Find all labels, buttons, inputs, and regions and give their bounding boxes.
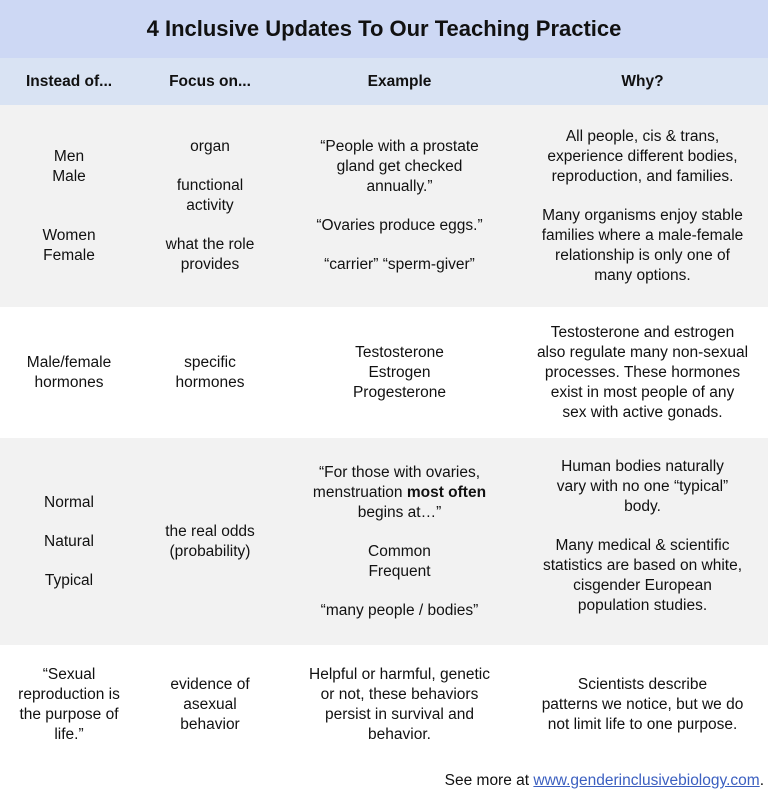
row 2: sex with active gonads.: [562, 404, 723, 420]
row 1: Many organisms enjoy stable: [542, 206, 743, 224]
row 3: the real odds: [165, 522, 255, 540]
row 4: persist in survival and: [325, 706, 474, 723]
row 1: activity: [186, 197, 234, 214]
row 3: begins at…”: [358, 504, 441, 520]
row 2: [27, 324, 748, 420]
row 1: many options.: [594, 266, 691, 284]
row 2: processes. These hormones: [545, 364, 740, 380]
row 1: families where a male-female: [542, 226, 743, 244]
row 3: cisgender European: [573, 577, 712, 594]
row 2: Male/female: [27, 354, 111, 370]
row 1: gland get checked: [337, 158, 462, 175]
row 4: behavior: [180, 716, 240, 733]
row 4: asexual: [183, 696, 237, 713]
row 2: specific: [184, 354, 236, 370]
row 2: Estrogen: [368, 364, 431, 380]
row 2: Progesterone: [353, 384, 446, 400]
row 2: also regulate many non-sexual: [537, 344, 748, 360]
row 1: “carrier” “sperm-giver”: [324, 256, 475, 273]
row 1: Male: [52, 168, 86, 184]
row 1: functional: [177, 177, 243, 194]
row 4: Helpful or harmful, genetic: [309, 666, 490, 683]
row 3: body.: [624, 498, 661, 515]
header row: Focus on...: [169, 72, 251, 90]
row 4: the purpose of: [19, 706, 119, 723]
row 1: provides: [181, 256, 239, 273]
row 1: what the role: [166, 236, 254, 253]
row 3: Natural: [44, 532, 94, 550]
row 1: Female: [43, 246, 95, 264]
row 3: Many medical & scientific: [555, 537, 730, 554]
row 4: not limit life to one purpose.: [548, 716, 737, 733]
row 1: “People with a prostate: [320, 138, 479, 155]
row 1: experience different bodies,: [547, 148, 738, 164]
row 3: Human bodies naturally: [561, 458, 724, 475]
row 1: All people, cis & trans,: [566, 128, 719, 144]
row 3: menstruation most often: [313, 484, 486, 500]
row 2: Testosterone and estrogen: [551, 324, 734, 340]
row 1: Men: [54, 148, 84, 164]
row 4: behavior.: [368, 726, 431, 743]
row 3: vary with no one “typical”: [557, 478, 728, 495]
row 4: patterns we notice, but we do: [542, 696, 743, 713]
row 3: “For those with ovaries,: [319, 464, 480, 480]
row 4: “Sexual: [43, 666, 95, 683]
row 3: Normal: [44, 494, 94, 510]
row 1: reproduction, and families.: [552, 168, 733, 184]
footer: See more at www.genderinclusivebiology.com.: [445, 772, 764, 789]
row 1: Women: [42, 226, 96, 244]
row 4: Scientists describe: [578, 676, 707, 693]
row 2: Testosterone: [355, 344, 444, 360]
row 3: population studies.: [578, 597, 707, 614]
row 2: hormones: [176, 374, 244, 390]
row 4: reproduction is: [18, 686, 120, 703]
row 3: [44, 458, 742, 618]
row 2: exist in most people of any: [551, 384, 734, 400]
row 1: “Ovaries produce eggs.”: [316, 217, 483, 234]
row 3: statistics are based on white,: [543, 557, 742, 574]
row 4: life.”: [54, 726, 84, 743]
row 3: “many people / bodies”: [321, 602, 478, 618]
row 4: [18, 666, 743, 743]
row 3: Common: [368, 542, 431, 560]
row 4: or not, these behaviors: [321, 686, 478, 703]
title: 4 Inclusive Updates To Our Teaching Practice: [147, 16, 621, 41]
row 1: organ: [190, 138, 230, 155]
row 4: evidence of: [170, 676, 250, 693]
row 3: Frequent: [368, 562, 431, 580]
header row: Instead of...: [26, 72, 112, 90]
header row: Why?: [621, 72, 664, 90]
row 3: Typical: [45, 572, 93, 588]
row 3: (probability): [170, 542, 250, 560]
row 1: [42, 128, 743, 284]
row 1: annually.”: [366, 178, 433, 195]
row 1: relationship is only one of: [555, 246, 730, 264]
header row: [26, 72, 664, 90]
header row: Example: [368, 72, 431, 90]
row 2: hormones: [35, 374, 103, 390]
